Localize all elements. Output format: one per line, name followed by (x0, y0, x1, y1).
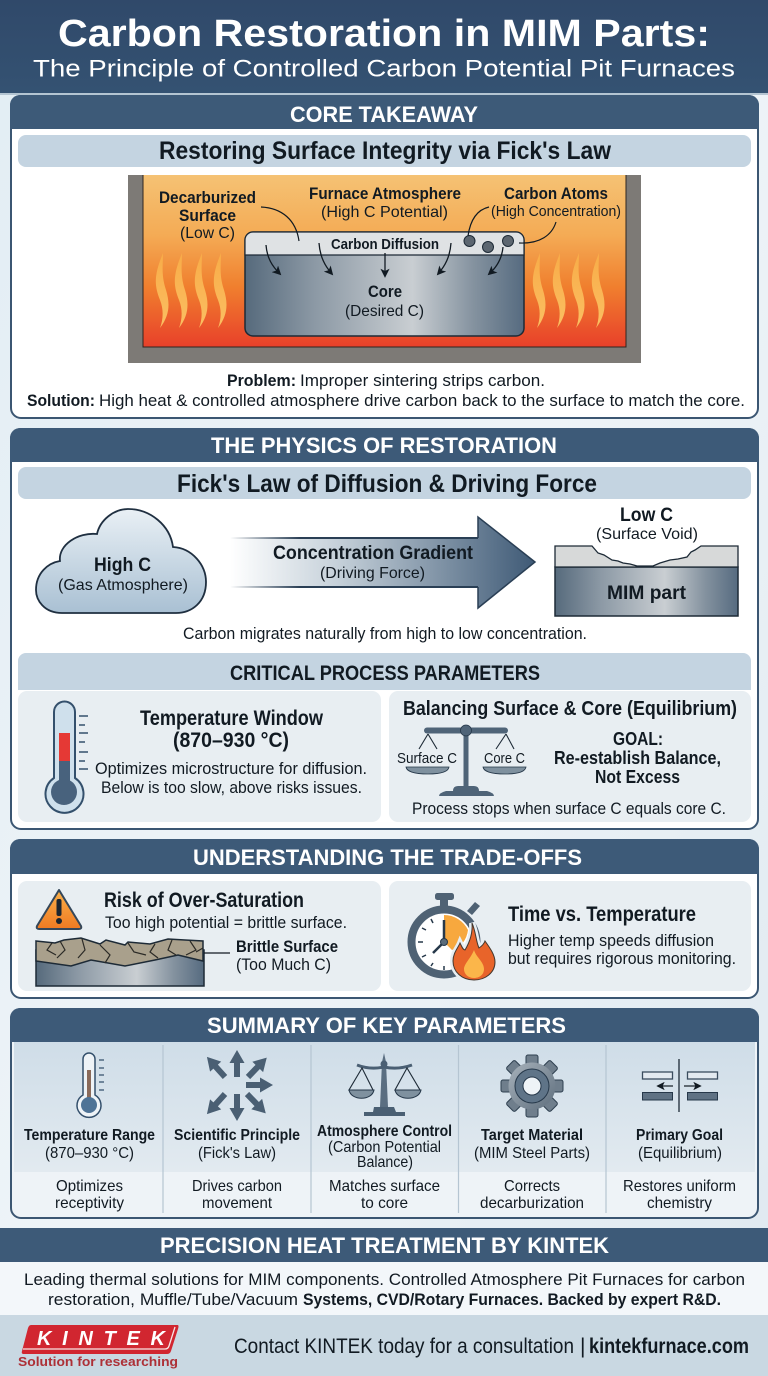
logo: kintek (18, 1325, 178, 1369)
logo: kintek: KINTEK (37, 1328, 167, 1350)
panel: trade-offs (10, 839, 759, 998)
heading: core takeaway: CORE TAKEAWAY (290, 102, 478, 127)
icon: gear (501, 1055, 563, 1117)
label: core: Core (368, 282, 402, 301)
label: furnace atmosphere (309, 184, 461, 221)
column: primary goal: Primary Goal (636, 1127, 723, 1144)
column: scientific principle: movement (202, 1195, 273, 1212)
label: decarburized surface: Surface (179, 206, 236, 225)
diagram: brittle surface: (Too Much C) (236, 955, 331, 974)
label: core (345, 282, 424, 320)
caption: carbon migrates: Carbon migrates naturally from high to low concentration. (183, 624, 587, 643)
card: time vs temperature: Higher temp speeds diffusion (508, 931, 714, 950)
card: balancing surface and core (389, 691, 751, 822)
icon: flame (453, 923, 495, 980)
subheading: critical parameters (18, 653, 751, 690)
footer: precision heat treatment (0, 1228, 768, 1315)
heading: kintek: PRECISION HEAT TREATMENT BY KINTEK (160, 1233, 609, 1258)
subheading: surface integrity: Restoring Surface Integrity via Fick's Law (159, 137, 612, 165)
label: furnace atmosphere: (High C Potential) (321, 204, 448, 221)
label: core: (Desired C) (345, 303, 424, 320)
label: carbon diffusion: Carbon Diffusion (331, 236, 439, 253)
text: problem and solution: Improper sintering strips carbon. (300, 371, 545, 390)
column: atmosphere control: to core (361, 1195, 408, 1212)
column: target material: (MIM Steel Parts) (474, 1145, 590, 1162)
label: decarburized surface: (Low C) (180, 225, 235, 242)
column: primary goal: chemistry (647, 1195, 712, 1212)
subheading: surface integrity (18, 135, 751, 167)
column: scientific principle: (Fick's Law) (198, 1145, 276, 1162)
icon: balance scale: Surface C (397, 750, 457, 767)
icon: stopwatch with flame (412, 893, 495, 980)
column: scientific principle (174, 1050, 300, 1212)
card: balancing surface and core: Re-establish Balance, (554, 748, 721, 768)
contact band (0, 1315, 768, 1376)
logo: kintek: Solution for researching (18, 1354, 178, 1369)
furnace diagram (128, 175, 641, 363)
column: target material: Target Material (481, 1127, 583, 1144)
text: problem and solution: High heat & controlled atmosphere drive carbon back to the surface to match the core. (99, 391, 745, 410)
title banner: Carbon Restoration in MIM Parts: (58, 13, 710, 55)
card: over-saturation: Too high potential = brittle surface. (105, 913, 347, 932)
card: temperature window: Temperature Window (140, 707, 324, 730)
column: atmosphere control: Matches surface (329, 1178, 440, 1195)
metal part (245, 232, 524, 336)
column: scientific principle: Scientific Principle (174, 1127, 300, 1144)
text: company description (24, 1270, 745, 1309)
icon: cloud high C (36, 509, 206, 613)
card: balancing surface and core: Process stops when surface C equals core C. (412, 799, 726, 818)
heading: trade-offs: UNDERSTANDING THE TRADE-OFFS (193, 845, 582, 870)
icon: equilibrium bars (642, 1059, 718, 1112)
text: problem and solution (27, 371, 745, 410)
card: temperature window: Below is too slow, above risks issues. (101, 778, 362, 797)
arrow: concentration gradient: Concentration Gradient (273, 543, 474, 564)
card: over-saturation: Risk of Over-Saturation (104, 889, 304, 912)
subheading: fick's law: Fick's Law of Diffusion & Driving Force (177, 470, 597, 498)
column: temperature range: (870–930 °C) (45, 1145, 134, 1162)
column: atmosphere control: Balance) (357, 1154, 413, 1171)
icon: thermometer (45, 702, 88, 813)
label: carbon atoms (491, 184, 621, 220)
diffusion arrows (266, 243, 503, 276)
column: temperature range: Optimizes (56, 1178, 123, 1195)
text: company description: Systems, CVD/Rotary Furnaces. Backed by expert R&D. (303, 1290, 721, 1309)
diagram: MIM part with void: Low C (620, 505, 673, 526)
icon: diffusion arrows (201, 1050, 273, 1121)
leader lines (261, 207, 556, 243)
diagram: MIM part with void: MIM part (607, 583, 687, 604)
column: atmosphere control: (Carbon Potential (328, 1139, 441, 1156)
icon: cloud high C: High C (94, 555, 151, 576)
column: primary goal: Restores uniform (623, 1178, 736, 1195)
column: primary goal: (Equilibrium) (638, 1145, 722, 1162)
column: atmosphere control (317, 1053, 452, 1212)
text: company description: restoration, Muffle/Tube/Vacuum (48, 1290, 298, 1309)
column: scientific principle: Drives carbon (192, 1178, 282, 1195)
column: target material: decarburization (480, 1195, 584, 1212)
icon: scales (349, 1053, 421, 1116)
icon: balance scale (397, 725, 526, 796)
card: balancing surface and core: GOAL: (613, 729, 663, 749)
label: carbon atoms: Carbon Atoms (504, 184, 608, 203)
column: temperature range: receptivity (55, 1195, 124, 1212)
card: time vs temperature: Time vs. Temperature (508, 903, 696, 926)
arrow: concentration gradient (230, 517, 535, 608)
card: over-saturation (18, 881, 381, 991)
text: problem and solution: Solution: (27, 391, 95, 410)
label: furnace atmosphere: Furnace Atmosphere (309, 184, 461, 203)
card: balancing surface and core: Balancing Surface & Core (Equilibrium) (403, 698, 737, 720)
column: atmosphere control: Atmosphere Control (317, 1123, 452, 1140)
diagram: MIM part with void: (Surface Void) (596, 526, 698, 543)
card: balancing surface and core: Not Excess (595, 767, 680, 787)
label: decarburized surface (159, 188, 256, 242)
icon: cloud high C: (Gas Atmosphere) (58, 577, 188, 594)
text: company description: Leading thermal solutions for MIM components. Controlled Atmosphere Pit Furnaces for carbon (24, 1270, 745, 1289)
label: carbon atoms: (High Concentration) (491, 203, 621, 220)
title banner (0, 0, 768, 95)
panel: core takeaway (10, 95, 759, 418)
column: target material: Corrects (504, 1178, 560, 1195)
title banner: The Principle of Controlled Carbon Potential Pit Furnaces (33, 56, 735, 82)
card: time vs temperature: but requires rigorous monitoring. (508, 949, 736, 968)
heading: summary: SUMMARY OF KEY PARAMETERS (207, 1013, 566, 1038)
panel: physics of restoration (10, 428, 759, 829)
heading: physics: THE PHYSICS OF RESTORATION (211, 433, 557, 458)
subheading: fick's law (18, 467, 751, 499)
text: contact: Contact KINTEK today for a consultation (234, 1335, 574, 1358)
diagram: MIM part with void (555, 505, 738, 616)
icon: right flames (533, 253, 604, 328)
panel: summary of key parameters (10, 1008, 759, 1218)
carbon atoms (464, 236, 514, 252)
text: contact: | (580, 1335, 585, 1358)
diagram: brittle surface (36, 937, 338, 986)
icon: thermometer (77, 1053, 104, 1117)
arrow: concentration gradient: (Driving Force) (320, 565, 425, 582)
column: target material (474, 1055, 590, 1212)
subheading: critical parameters: CRITICAL PROCESS PARAMETERS (230, 662, 540, 685)
column: primary goal (623, 1059, 736, 1212)
label: decarburized surface: Decarburized (159, 188, 256, 207)
card: temperature window: (870–930 °C) (173, 729, 289, 752)
column: temperature range: Temperature Range (24, 1127, 155, 1144)
text: problem and solution: Problem: (227, 371, 296, 390)
card: temperature window: Optimizes microstructure for diffusion. (95, 759, 367, 778)
card: time vs temperature (389, 881, 751, 991)
icon: balance scale: Core C (484, 750, 525, 767)
card: temperature window (18, 691, 381, 822)
diagram: brittle surface: Brittle Surface (236, 937, 338, 956)
icon: left flames (156, 253, 226, 328)
icon: warning triangle (37, 890, 81, 929)
column: temperature range (24, 1053, 155, 1212)
